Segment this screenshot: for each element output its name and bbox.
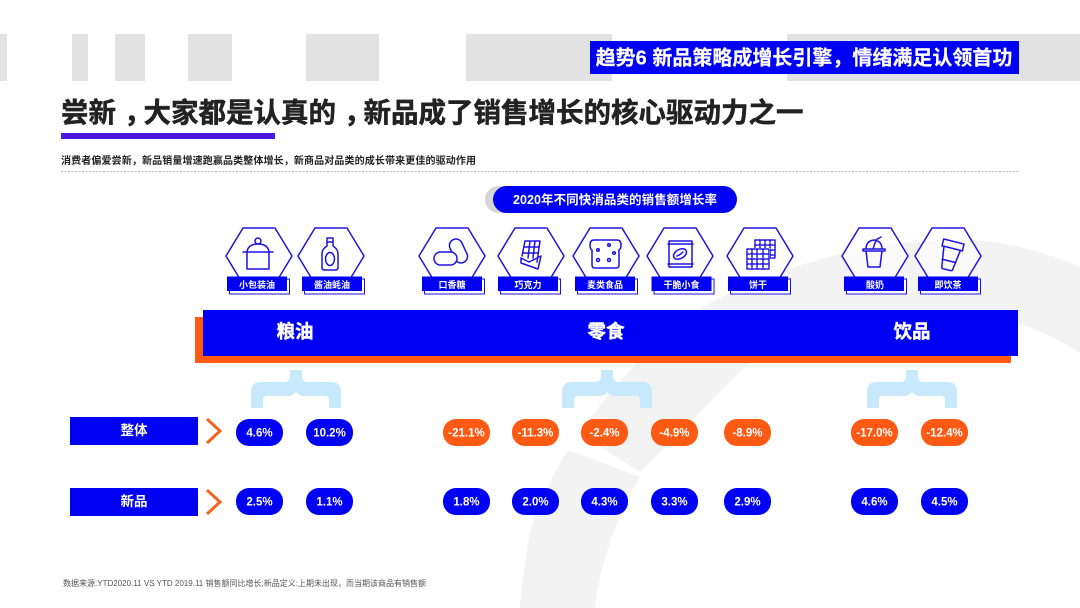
item: 饼干 [727,228,793,294]
item: 巧克力 [498,228,564,294]
category band: 饮品 [893,321,931,342]
item: 干脆小食 [647,228,714,294]
values row: 新品 [236,488,968,515]
values row: 整体: -8.9% [732,428,763,440]
item: 巧克力: 巧克力 [514,279,542,290]
item: 干脆小食: 干脆小食 [663,279,700,290]
values row: 整体: -2.4% [589,428,620,440]
title underline [61,133,275,139]
values row: 新品: 2.5% [246,496,273,508]
bracket: 饮品 [867,370,957,408]
item: 酸奶: 酸奶 [866,279,884,290]
category band: 粮油 [276,321,314,342]
item: 口香糖 [419,228,485,294]
category band: 零食 [587,321,625,342]
values row: 整体: 4.6% [246,428,273,440]
chart heading pill [485,186,737,213]
values row: 整体: -11.3% [518,428,553,440]
item: 即饮茶 [915,228,981,294]
item: 小包装油 [226,228,292,294]
background logo watermark [520,240,1080,608]
item: 饼干: 饼干 [749,279,767,290]
category band [195,310,1018,363]
chart heading pill: 2020年不同快消品类的销售额增长率 [513,192,717,207]
values row: 整体: -4.9% [659,428,690,440]
values row: 新品: 4.6% [861,496,888,508]
values row: 整体: -21.1% [448,428,485,440]
values row: 新品: 3.3% [661,496,688,508]
item: 麦类食品: 麦类食品 [587,279,623,290]
values row: 整体: -17.0% [856,428,893,440]
arrow: 整体 [207,419,220,443]
subtitle: 消费者偏爱尝新，新品销量增速跑赢品类整体增长，新商品对品类的成长带来更佳的驱动作用 [61,154,476,167]
values row: 整体 [236,419,968,446]
values row: 新品: 4.3% [591,496,618,508]
values row: 新品: 4.5% [931,496,958,508]
arrow: 新品 [207,490,220,514]
row label: 新品 [70,488,198,516]
item: 小包装油: 小包装油 [239,279,275,290]
values row: 新品: 2.0% [522,496,549,508]
values row: 新品: 2.9% [734,496,761,508]
trend tag: 趋势6 新品策略成增长引擎，情绪满足认领首功 [596,46,1012,70]
row label: 整体: 整体 [120,422,148,438]
row label: 新品: 新品 [120,493,148,509]
item: 麦类食品 [573,228,639,294]
item: 酸奶 [842,228,908,294]
item: 酱油蚝油: 酱油蚝油 [314,279,350,290]
header band of grey blocks [0,34,1080,81]
bracket: 粮油 [251,370,341,408]
values row: 新品: 1.8% [453,496,480,508]
values row: 整体: -12.4% [926,428,963,440]
item: 即饮茶: 即饮茶 [934,279,962,290]
item: 酱油蚝油 [298,228,364,294]
trend tag [590,41,1019,74]
values row: 整体: 10.2% [313,428,346,440]
source note: 数据来源:YTD2020.11 VS YTD 2019.11 销售额同比增长;新品定义:上期未出现，而当期该商品有销售额 [63,578,426,588]
row label: 整体 [70,417,198,445]
values row: 新品: 1.1% [316,496,343,508]
bracket: 零食 [562,370,652,408]
item: 口香糖: 口香糖 [438,279,466,290]
title: 尝新 ，大家都是认真的 ，新品成了销售增长的核心驱动力之一 [61,97,804,128]
